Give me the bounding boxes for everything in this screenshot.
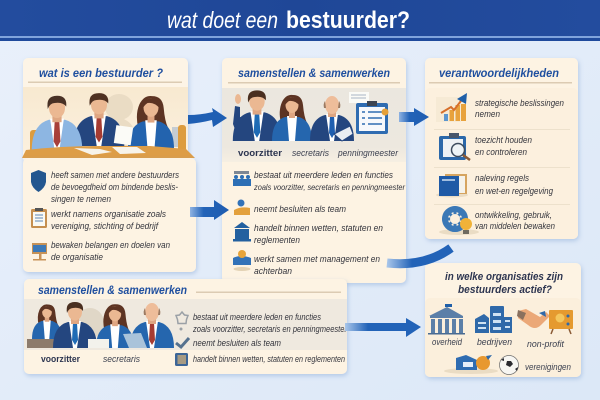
title	[167, 7, 410, 34]
arrow: bottom panel to organisations	[345, 318, 421, 337]
labels: roles	[41, 354, 140, 365]
text: leden: bestaat uit meerdere leden en functies	[193, 312, 321, 323]
header band	[0, 0, 600, 41]
icon: presentation board	[32, 243, 47, 260]
text: bindende beslissingen: heeft samen met andere bestuurders	[51, 170, 179, 181]
icon: star	[176, 312, 188, 324]
text: leden	[192, 312, 348, 335]
icon: government building	[428, 304, 465, 334]
text: bewaken belangen: de organisatie	[51, 252, 103, 263]
text: neemt besluiten: neemt besluiten als team	[254, 204, 346, 215]
panel: samenstellen & samenwerken top	[222, 58, 406, 283]
text: handelt binnen: reglementen	[254, 235, 300, 246]
text: werkt namens: vereniging, stichting of bedrijf	[51, 221, 159, 232]
text: werkt namens: werkt namens organisatie zoals	[51, 209, 166, 220]
arrow: list to panel 2 lower	[190, 200, 229, 220]
labels: roles: penningmeester	[337, 148, 399, 159]
arrow: panel 2 to panel 3	[399, 108, 429, 126]
illustration: board members	[233, 90, 388, 141]
heading: in welke organisaties	[445, 271, 563, 296]
icon: growth chart	[436, 93, 467, 122]
text: meerdere leden	[253, 170, 406, 192]
heading: in welke organisaties: bestuurders actief?	[458, 284, 552, 296]
panel: samenstellen & samenwerken bottom	[24, 279, 348, 374]
labels: roles: voorzitter	[41, 354, 80, 365]
heading: verantwoordelijkheden: verantwoordelijkheden	[439, 66, 559, 80]
text: bewaken belangen	[51, 240, 170, 263]
text: bindende beslissingen: singen te nemen	[51, 194, 111, 205]
arrow: panel 1 to panel 2	[188, 108, 227, 127]
icon: check	[176, 338, 189, 347]
labels: roles: secretaris	[103, 354, 140, 365]
text: toezicht	[475, 135, 532, 158]
icon: rule book	[175, 353, 188, 366]
labels: roles: secretaris	[292, 148, 329, 159]
heading: wat is een bestuurder: wat is een bestuurder ?	[39, 66, 164, 80]
heading: samenstellen & samenwerken: samenstellen & samenwerken	[238, 66, 390, 80]
icon: football	[500, 356, 518, 374]
text: meerdere leden: bestaat uit meerdere leden en functies	[254, 170, 393, 181]
panel: list what is	[23, 158, 196, 272]
bullet	[180, 328, 182, 330]
icon: management	[233, 250, 251, 271]
text: naleving	[475, 173, 554, 197]
text: handelt binnen: handelt binnen wetten, statuten en	[254, 223, 383, 234]
panel: organisaties	[425, 263, 581, 377]
label: bedrijven: bedrijven	[477, 337, 512, 348]
icon: gear and bulb	[439, 206, 479, 235]
icon: clipboard magnifier	[439, 133, 470, 160]
text: strategische	[475, 98, 564, 120]
text: werkt samen: werkt samen met management en	[254, 254, 380, 265]
icon: club house	[444, 355, 498, 374]
text: handelt binnen	[254, 223, 383, 246]
panel: wat is een bestuurder	[22, 58, 195, 163]
text: leden: zoals voorzitter, secretaris en penningmeester	[192, 324, 348, 335]
icon: decision	[234, 200, 250, 215]
text: naleving: en wet-en regelgeving	[475, 186, 554, 197]
text: strategische: strategische beslissingen	[475, 98, 564, 109]
label: verenigingen: verenigingen	[525, 362, 571, 373]
icon: team	[233, 171, 251, 186]
heading: samenstellen & samenwerken: samenstellen & samenwerken	[38, 283, 187, 297]
text: bindende beslissingen: de bevoegdheid om bindende beslis-	[51, 182, 178, 193]
text: ontwikkeling	[475, 210, 555, 232]
text: besluiten: neemt besluiten als team	[193, 338, 281, 349]
text: toezicht: toezicht houden	[475, 135, 532, 146]
icon: institution	[233, 222, 251, 242]
text: werkt samen	[254, 254, 380, 277]
label: non-profit: non-profit	[527, 339, 564, 350]
text: ontwikkeling: ontwikkeling, gebruik,	[475, 210, 552, 221]
label: overheid: overheid	[432, 337, 463, 348]
text: bewaken belangen: bewaken belangen en doelen van	[51, 240, 170, 251]
panel: verantwoordelijkheden	[425, 58, 578, 239]
icon: shield	[31, 170, 46, 192]
arrow: curved to organisations	[387, 248, 451, 264]
icon: rule books	[436, 174, 468, 198]
text: strategische: nemen	[475, 109, 500, 120]
text: werkt samen: achterban	[254, 266, 292, 277]
illustration: meeting	[22, 93, 195, 158]
text: toezicht: en controleren	[475, 147, 527, 158]
labels: roles	[238, 148, 399, 159]
text: bindende beslissingen	[51, 170, 179, 205]
illustration: team at table	[27, 302, 174, 348]
heading: in welke organisaties: in welke organisaties zijn	[445, 271, 563, 283]
icon: clipboard	[31, 208, 47, 228]
title: bestuurder?	[286, 7, 410, 34]
text: meerdere leden: zoals voorzitter, secretaris en penningmeester	[253, 182, 406, 192]
text: werkt namens	[51, 209, 166, 232]
text: handelt: handelt binnen wetten, statuten en reglementen	[193, 354, 345, 365]
text: ontwikkeling: van middelen bewaken	[475, 221, 555, 232]
text: naleving: naleving regels	[475, 173, 529, 184]
icon: handshake and notice board	[517, 309, 573, 334]
icon: companies	[475, 306, 512, 333]
labels: roles: voorzitter	[238, 148, 282, 159]
title: wat doet een	[167, 7, 278, 33]
